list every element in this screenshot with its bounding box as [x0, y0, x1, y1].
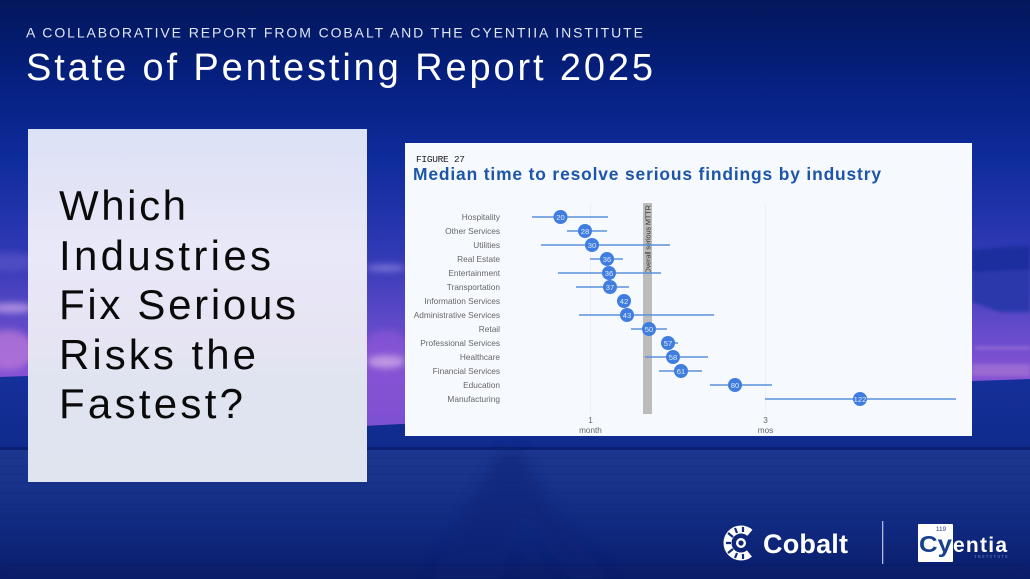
question text: Risks the [59, 331, 256, 378]
title: State of Pentesting Report 2025 [26, 47, 653, 89]
question text: Industries [59, 232, 271, 279]
median dots [554, 210, 867, 406]
industry labels: Professional Services [420, 338, 500, 348]
industry labels: Retail [479, 324, 500, 334]
industry labels: Transportation [447, 282, 500, 292]
industry labels: Hospitality [462, 212, 501, 222]
figure label: FIGURE 27 [416, 154, 465, 165]
median values: 30 [588, 241, 596, 250]
industry labels: Financial Services [433, 366, 500, 376]
industry labels: Administrative Services [414, 310, 500, 320]
overall MTTR band: Overall serious MTTR [644, 205, 652, 274]
water ripples [0, 458, 1030, 548]
median values: 50 [645, 325, 653, 334]
median values: 80 [731, 381, 739, 390]
logo: Cyentia Institute: INSTITUTE [974, 554, 1008, 560]
median values: 58 [669, 353, 677, 362]
industry labels: Other Services [445, 226, 500, 236]
logo: Cobalt: Cobalt [763, 529, 848, 559]
question text: Fix Serious [59, 281, 296, 328]
overall MTTR band [643, 203, 652, 414]
median values: 20 [556, 213, 565, 222]
median values: 42 [620, 297, 628, 306]
chart title: Median time to resolve serious findings by industry [413, 164, 881, 184]
x axis labels: mos [758, 426, 773, 435]
median values: 36 [605, 269, 613, 278]
median values: 28 [581, 227, 589, 236]
divider between logos [882, 521, 883, 564]
panel: chart card [405, 143, 972, 436]
x axis labels: 3 [763, 416, 768, 425]
x axis labels: month [579, 426, 602, 435]
question text: Which [59, 182, 186, 229]
median values: 57 [664, 339, 672, 348]
range lines [532, 217, 956, 399]
small heading: report attribution: A COLLABORATIVE REPORT FROM COBALT AND THE CYENTIIA INSTITUTE [26, 24, 643, 40]
panel: question [28, 129, 367, 482]
median values: 43 [623, 311, 631, 320]
chart: median time by industry [414, 203, 956, 435]
median values [556, 213, 866, 404]
logo: Cyentia Institute: Cy [919, 531, 952, 557]
industry labels: Entertainment [448, 268, 501, 278]
logo: Cobalt [726, 527, 848, 559]
question text [59, 182, 296, 427]
median values: 37 [606, 283, 614, 292]
industry labels: Utilities [473, 240, 500, 250]
median values: 36 [603, 255, 611, 264]
logo: Cyentia Institute: 119 [936, 526, 947, 533]
question text: Fastest? [59, 380, 243, 427]
industry labels: Manufacturing [447, 394, 500, 404]
industry labels: Real Estate [457, 254, 500, 264]
icon: Cobalt gear ring [726, 527, 754, 559]
logo: Cyentia Institute: entia [953, 534, 1007, 557]
x axis labels: 1 [588, 416, 593, 425]
logo: Cyentia Institute [918, 524, 1008, 562]
median values: 122 [854, 395, 866, 404]
industry labels: Information Services [424, 296, 500, 306]
industry labels: Education [463, 380, 500, 390]
right dark clouds [972, 246, 1030, 376]
x axis labels [579, 416, 773, 435]
median values: 61 [677, 367, 685, 376]
industry labels: Healthcare [460, 352, 500, 362]
industry labels [414, 212, 501, 404]
tracks on the sea [430, 452, 610, 579]
